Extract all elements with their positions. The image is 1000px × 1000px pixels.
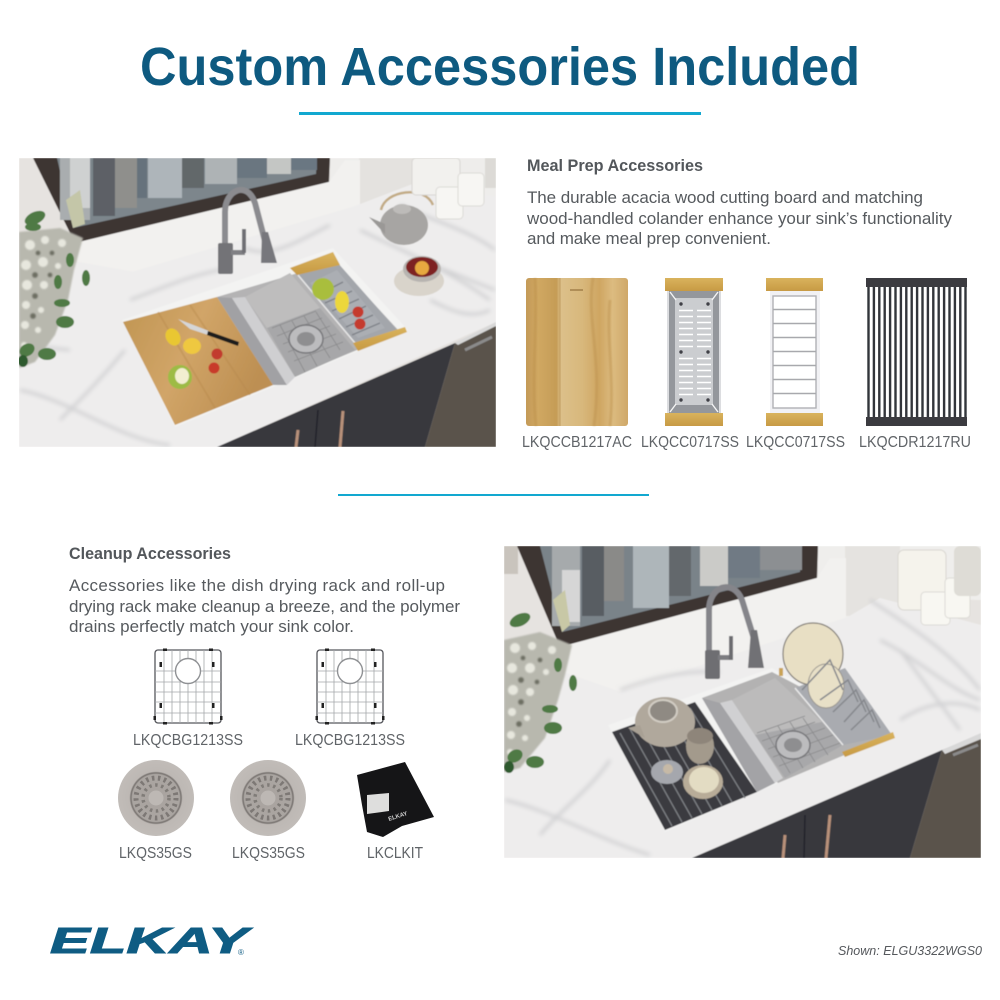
label: LKQCBG1213SS [295,732,405,749]
logo: Elkay: ELKAY [50,920,253,961]
product: bottom grid 2 [316,648,384,724]
wood bar [842,732,895,757]
tea cup [394,266,444,296]
text block: cleanup description: Accessories like the dish drying rack and roll-up [69,576,445,595]
text block: cleanup description [69,576,460,636]
product: towel and sponge kit [357,762,434,837]
teapot [635,697,695,747]
cabinet [692,750,942,858]
label: LKQCBG1213SS [133,732,243,749]
saucer [651,760,683,784]
rim [122,248,408,427]
bowl [683,765,723,799]
sill [560,558,846,692]
text block: cleanup description: drying rack make cleanup a breeze, and the polymer [69,597,460,616]
logo: Elkay [50,920,253,961]
canisters [412,158,460,195]
faucet [709,587,755,650]
product: cutting board [526,278,628,426]
window frame [517,546,818,647]
heading: meal prep accessories: Meal Prep Accessories [527,157,703,175]
label: LKQCDR1217RU [859,434,971,451]
board [123,297,273,425]
cup [686,728,714,764]
basin [217,262,400,385]
fruit in colander [312,278,334,300]
heading: cleanup accessories: Cleanup Accessories [69,545,231,563]
flowers [504,632,572,772]
cabinet [217,343,455,447]
sill [75,160,360,272]
label: LKQCC0717SS [641,434,739,451]
label: LKCLKIT [367,845,423,862]
faucet [225,190,266,248]
text block: meal prep description: and make meal prep convenient. [527,229,771,248]
product: drain 2 [230,760,306,836]
label: LKQS35GS [232,845,305,862]
flowers [19,228,83,368]
product: roll-up drying rack [866,278,967,426]
dish rack tray [795,668,892,745]
text block: meal prep description: The durable acacia wood cutting board and matching [527,188,923,207]
plates [783,623,843,685]
knife [178,319,209,335]
canisters [898,550,946,610]
lemons, apple, berries [162,326,184,348]
rim [608,668,893,832]
roll-up rack [612,702,757,830]
window frame [33,158,330,243]
text block: cleanup description: drains perfectly match your sink color. [69,617,354,636]
product: towel and sponge kit: ELKAY [388,811,408,823]
photo: kitchen sink with drying racks [504,546,981,858]
product: colander [665,278,723,426]
text block: meal prep description [526,188,952,248]
title: Custom Accessories Included [140,37,860,97]
colander [298,262,397,343]
product: bottom grid 1 [154,648,222,724]
label: LKQCCB1217AC [522,434,632,451]
marble counter [504,598,981,858]
text block: meal prep description: wood-handled colander enhance your sink’s functionality [526,209,952,228]
product: drain 1 [118,760,194,836]
caption: shown model: Shown: ELGU3322WGS0 [838,943,983,958]
rack tines [802,660,880,730]
label: LKQS35GS [119,845,192,862]
kettle [380,205,428,245]
photo: kitchen sink with cutting board and colander [19,158,496,447]
basin [702,672,892,783]
product: colander grid [766,278,823,426]
logo: Elkay: ® [238,948,244,957]
label: LKQCC0717SS [746,434,845,451]
marble counter [19,183,496,447]
